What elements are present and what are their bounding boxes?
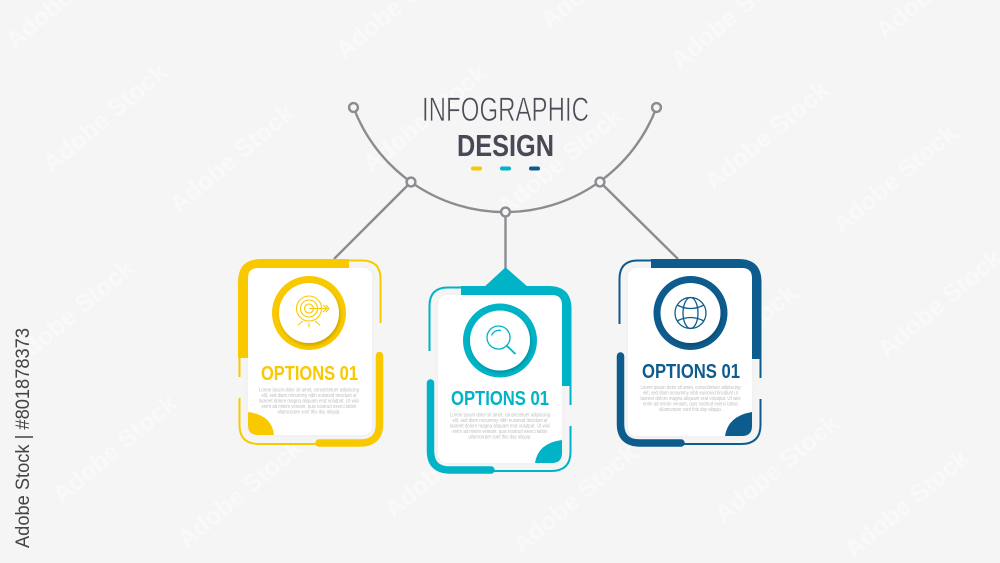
description: ullamcorper sont this day aliquip.: [659, 407, 722, 413]
circle badge: [463, 304, 537, 378]
connector arc and lines: [334, 103, 678, 270]
description: enim ad minim veniam, quis nostrud exerci tation: [452, 429, 548, 435]
watermark pattern: Adobe Stock: [172, 434, 307, 554]
description: Lorem ipsum dolor sit amet, consectetuer adipiscing: [450, 412, 550, 418]
title: DESIGN: [457, 128, 554, 163]
circle badge: [654, 276, 728, 350]
description: enim ad minim veniam, quis nostrud exerci tation: [643, 402, 738, 408]
watermark pattern: Adobe Stock: [164, 99, 299, 219]
watermark pattern: Adobe Stock: [379, 404, 514, 524]
description: laoreet dolore magna aliquam erat volutpat. Ut wisi: [640, 396, 740, 402]
description: ullamcorper sont this day aliquip.: [278, 410, 340, 416]
description: enim ad minim veniam, quis nostrud exerci tation: [262, 404, 357, 410]
corner leaf: [248, 412, 274, 435]
white card: [248, 268, 372, 435]
watermark pattern: Adobe Stock: [492, 102, 627, 222]
corner leaf: [535, 440, 562, 463]
watermark pattern: Adobe Stock: [699, 76, 834, 196]
description: elit, sed diam nonummy nibh euismod tincidunt ut: [643, 390, 739, 396]
icon: target: [296, 296, 329, 327]
white card: [628, 268, 752, 436]
option heading: OPTIONS 01: [451, 388, 549, 410]
watermark pattern: Adobe Stock: [827, 119, 962, 239]
option heading: OPTIONS 01: [642, 361, 740, 383]
description: [259, 388, 359, 416]
pointer triangle: [486, 268, 526, 286]
card frame: [238, 259, 380, 444]
description: laoreet dolore magna aliquam erat volutpat. Ut wisi: [450, 424, 550, 430]
panel: option card yellow: [238, 259, 380, 444]
stock id label: Adobe Stock | #801878373: [13, 328, 34, 548]
description: elit, sed diam nonummy nibh euismod tincidunt ut: [452, 418, 548, 424]
watermark pattern: Adobe Stock: [709, 409, 844, 529]
icon: globe: [675, 298, 706, 328]
watermark pattern: Adobe Stock: [357, 59, 492, 179]
white card: [438, 295, 562, 463]
watermark pattern: Adobe Stock: [37, 58, 172, 178]
title: [422, 91, 589, 163]
description: Lorem ipsum dolor sit amet, consectetuer adipiscing: [259, 388, 359, 394]
description: [450, 412, 550, 440]
card frame: [430, 286, 572, 471]
title colour dashes: [471, 166, 540, 170]
corner leaf: [725, 412, 752, 436]
description: [640, 385, 741, 413]
description: Lorem ipsum dolor sit amet, consectetuer adipiscing: [640, 385, 741, 391]
description: ullamcorper sont this day aliquip.: [468, 434, 532, 440]
description: elit, sed diam nonummy nibh euismod tincidunt ut: [262, 393, 357, 399]
icon: magnifier: [487, 326, 516, 354]
circle badge: [272, 276, 346, 350]
watermark pattern: Adobe Stock: [4, 254, 139, 374]
option heading: OPTIONS 01: [261, 363, 358, 385]
watermark pattern: Adobe Stock: [507, 439, 642, 559]
description: laoreet dolore magna aliquam erat volutpat. Ut wisi: [259, 398, 359, 404]
title: INFOGRAPHIC: [422, 91, 589, 129]
watermark pattern: Adobe Stock: [47, 389, 182, 509]
card frame: [620, 259, 762, 444]
watermark pattern: Adobe Stock: [667, 279, 802, 399]
watermark pattern: Adobe Stock: [839, 444, 974, 563]
panel: option card teal: [430, 268, 572, 471]
panel: option card blue: [620, 259, 762, 444]
